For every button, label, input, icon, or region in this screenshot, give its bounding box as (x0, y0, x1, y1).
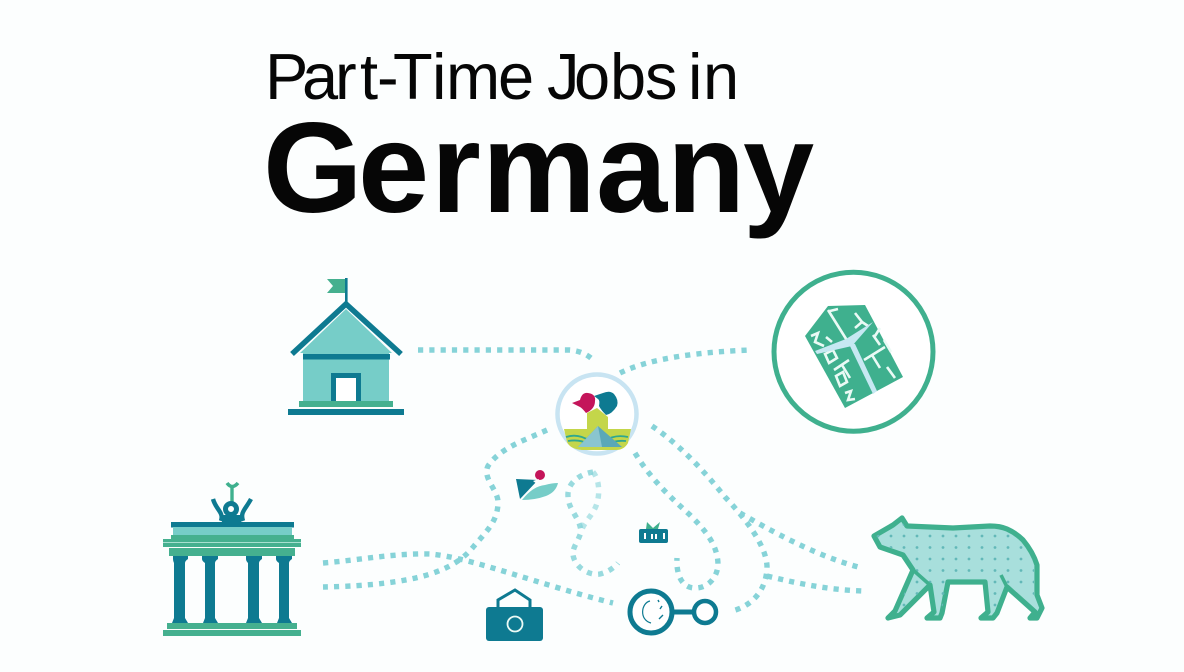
steps (299, 401, 393, 407)
quadriga statue (213, 483, 251, 522)
map (805, 305, 903, 408)
columns (172, 556, 292, 623)
dotted connector network (323, 350, 863, 611)
icon: linked circles (630, 591, 716, 633)
lime base (564, 408, 631, 450)
icon: Berlin bear (874, 518, 1042, 618)
icon: bag (486, 590, 543, 641)
icon: small planter sign (639, 522, 668, 543)
roof (292, 304, 401, 354)
icon: small boat (516, 470, 558, 500)
entablature (171, 522, 294, 528)
title (263, 40, 814, 240)
door (331, 373, 361, 402)
turbine blades (815, 322, 877, 394)
house body (300, 309, 392, 402)
icon: central hub badge (558, 374, 636, 454)
title line: Part-Time Jobs in: Part-Time Jobs in (265, 40, 739, 113)
icon: Brandenburg Gate (163, 483, 301, 636)
title line: Germany: Germany (263, 97, 814, 240)
tent (578, 426, 622, 447)
icon: circular map with wind turbine (774, 272, 933, 431)
water (566, 436, 628, 444)
teal figure (594, 392, 618, 415)
icon: house with flag (288, 278, 404, 415)
base steps (167, 623, 297, 629)
flag (327, 279, 345, 293)
magenta figure (572, 393, 595, 413)
map streets (811, 309, 895, 400)
